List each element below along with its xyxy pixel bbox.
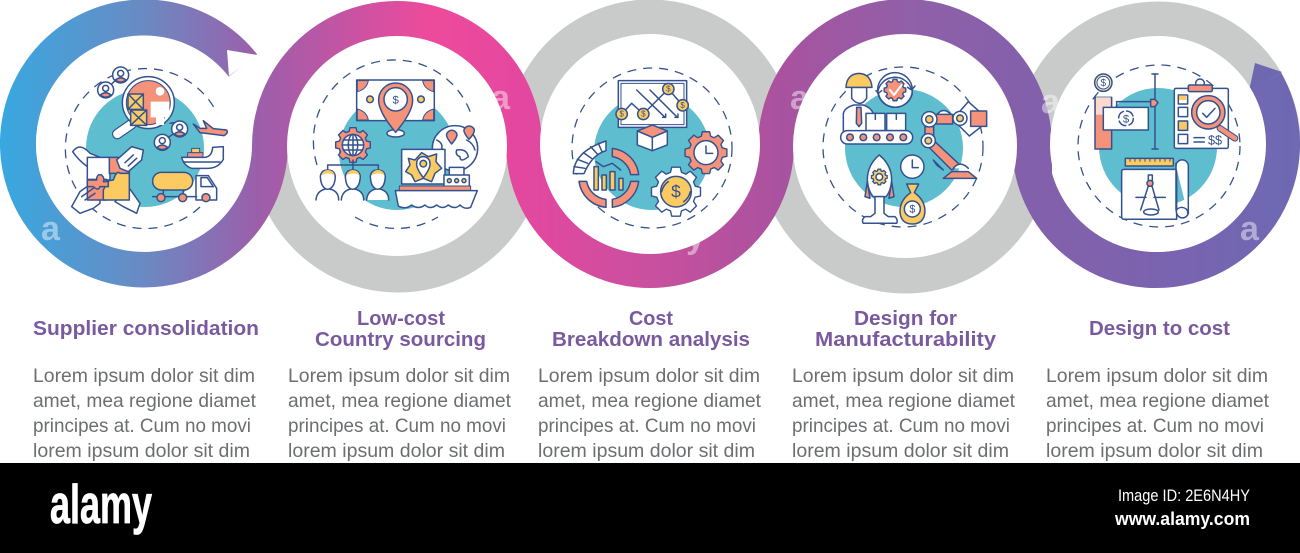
icon 1: supplier consolidation bbox=[65, 67, 227, 229]
clock bbox=[901, 155, 924, 178]
price chart with coins: $ bbox=[666, 85, 671, 94]
tanker truck bbox=[153, 172, 217, 202]
column 5 text: design to cost: Lorem ipsum dolor sit dim bbox=[1046, 365, 1268, 387]
coin, bar and banknote: $ bbox=[1123, 113, 1130, 125]
price chart with coins bbox=[616, 81, 688, 127]
column 1 text: supplier consolidation bbox=[33, 318, 259, 462]
cycle gear check bbox=[876, 73, 915, 107]
conveyor belt bbox=[841, 113, 913, 144]
column 4 text: design for manufacturability: amet, mea regione diamet bbox=[792, 390, 1016, 412]
vertical measure bbox=[1151, 74, 1158, 149]
ruler bbox=[1125, 158, 1173, 166]
column 3 text: cost breakdown analysis: Breakdown analysis bbox=[552, 329, 750, 351]
column 3 text: cost breakdown analysis: Lorem ipsum dolor sit dim bbox=[538, 365, 760, 387]
image id: Image ID: 2E6N4HY bbox=[1118, 486, 1250, 505]
coin, bar and banknote bbox=[1095, 74, 1153, 149]
column 3 text: cost breakdown analysis bbox=[538, 308, 762, 462]
globe with pins bbox=[432, 126, 478, 171]
column 3 text: cost breakdown analysis: principes at. Cum no movi bbox=[538, 415, 756, 437]
money bag bbox=[900, 184, 925, 224]
watermark letters: a bbox=[1041, 83, 1061, 121]
cargo ship bbox=[395, 167, 477, 208]
plane bbox=[193, 121, 227, 136]
column 3 text: cost breakdown analysis: Cost bbox=[629, 308, 673, 330]
blueprint and compass bbox=[1122, 160, 1188, 219]
price chart with coins: $ bbox=[641, 110, 646, 119]
banknote with pin bbox=[357, 80, 434, 137]
donut chart with bars bbox=[573, 141, 639, 207]
column 2 text: low-cost country sourcing bbox=[288, 308, 512, 462]
rocket bbox=[862, 155, 897, 223]
clipboard with magnifier: $$ bbox=[1208, 134, 1222, 148]
watermark letters bbox=[41, 79, 1260, 256]
column 4 text: design for manufacturability bbox=[792, 308, 1016, 462]
column 1 text: supplier consolidation: amet, mea regione diamet bbox=[33, 390, 257, 412]
money bag: $ bbox=[909, 204, 915, 216]
column 4 text: design for manufacturability: Manufacturability bbox=[815, 329, 997, 351]
icon 5: design to cost bbox=[1078, 65, 1240, 227]
column 2 text: low-cost country sourcing: principes at. Cum no movi bbox=[288, 415, 506, 437]
column 5 text: design to cost: amet, mea regione diamet bbox=[1046, 390, 1270, 412]
column 4 text: design for manufacturability: lorem ipsum dolor sit dim bbox=[792, 440, 1009, 462]
icon 4: design for manufacturability bbox=[823, 67, 987, 227]
ship bbox=[182, 147, 223, 168]
price chart with coins: $ bbox=[619, 110, 624, 119]
clock gear bbox=[685, 132, 727, 174]
watermark letters: a bbox=[41, 210, 61, 248]
clipboard with magnifier bbox=[1174, 79, 1235, 148]
column 2 text: low-cost country sourcing: Lorem ipsum dolor sit dim bbox=[288, 365, 510, 387]
white inner discs bbox=[36, 34, 1266, 258]
box bbox=[637, 125, 667, 151]
footer bar bbox=[0, 463, 1300, 553]
price chart with coins: $ bbox=[680, 101, 685, 110]
watermark letters: a bbox=[790, 79, 810, 117]
column 3 text: cost breakdown analysis: lorem ipsum dolor sit dim bbox=[538, 440, 755, 462]
column 2 text: low-cost country sourcing: Low-cost bbox=[357, 308, 445, 330]
icon 3: cost breakdown analysis bbox=[572, 68, 732, 228]
robot arm bbox=[921, 102, 987, 178]
column 1 text: supplier consolidation: Supplier consolidation bbox=[33, 318, 259, 340]
puzzle pieces and hands bbox=[72, 147, 143, 213]
watermark letters: y bbox=[686, 218, 705, 256]
column 5 text: design to cost bbox=[1046, 318, 1270, 462]
watermark letters: a bbox=[1240, 210, 1260, 248]
column 4 text: design for manufacturability: principes at. Cum no movi bbox=[792, 415, 1010, 437]
column 2 text: low-cost country sourcing: lorem ipsum dolor sit dim bbox=[288, 440, 505, 462]
column 4 text: design for manufacturability: Lorem ipsum dolor sit dim bbox=[792, 365, 1014, 387]
column 1 text: supplier consolidation: lorem ipsum dolor sit dim bbox=[33, 440, 250, 462]
magnifier bbox=[117, 77, 174, 134]
team org chart bbox=[316, 160, 389, 200]
coin, bar and banknote: $ bbox=[1101, 78, 1107, 89]
website: www.alamy.com bbox=[1114, 509, 1250, 529]
dollar gear: $ bbox=[671, 182, 681, 202]
banknote with pin: $ bbox=[392, 94, 399, 106]
column 4 text: design for manufacturability: Design for bbox=[854, 308, 957, 330]
column 5 text: design to cost: Design to cost bbox=[1089, 318, 1230, 340]
screen with gear and pin bbox=[402, 149, 445, 184]
gear with globe bbox=[336, 128, 370, 162]
dollar gear bbox=[651, 167, 700, 216]
icon 2: low-cost country sourcing bbox=[313, 60, 478, 228]
watermark letters: a bbox=[491, 79, 511, 117]
users bbox=[98, 67, 188, 150]
column 1 text: supplier consolidation: principes at. Cum no movi bbox=[33, 415, 251, 437]
grey background ring segments bbox=[270, 18, 1282, 275]
column 1 text: supplier consolidation: Lorem ipsum dolor sit dim bbox=[33, 365, 255, 387]
column 5 text: design to cost: principes at. Cum no movi bbox=[1046, 415, 1264, 437]
column 3 text: cost breakdown analysis: amet, mea regione diamet bbox=[538, 390, 762, 412]
column 2 text: low-cost country sourcing: Country sourcing bbox=[315, 329, 486, 351]
ribbon: flowing gradient path with arrow head bbox=[18, 17, 1282, 270]
column 5 text: design to cost: lorem ipsum dolor sit dim bbox=[1046, 440, 1263, 462]
engineer bbox=[843, 73, 873, 132]
column 2 text: low-cost country sourcing: amet, mea regione diamet bbox=[288, 390, 512, 412]
alamy logo: alamy bbox=[50, 473, 152, 535]
